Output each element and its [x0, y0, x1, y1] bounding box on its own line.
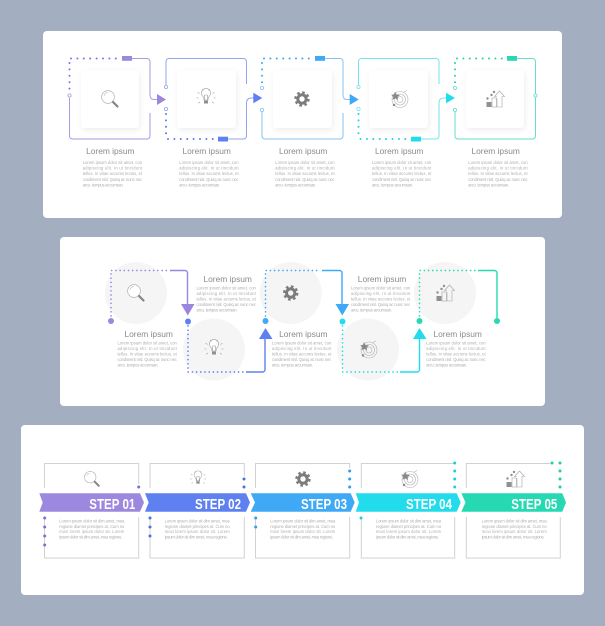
text block: step 1: Lorem ipsum dolor sit amet, con — [118, 341, 178, 346]
text block: step 3: Lorem ipsum — [279, 329, 328, 339]
text block: step 2 — [196, 274, 257, 312]
step 4: square frame and arrow — [357, 58, 455, 142]
step 01: box, chevron, icon and text: Lorem ipsum dolor sit dim amet, mea — [59, 519, 125, 524]
text block: step 2: adipiscing elit. In ut tincidunt — [196, 291, 257, 296]
step 2: square frame and arrow — [164, 58, 262, 142]
text block: step 1: adipiscing elit. In ut tincidunt — [118, 346, 178, 351]
text block: step 4: adipiscing elit. In ut tincidunt — [372, 166, 432, 171]
text block: step 5: arcu. tempus accumsan. — [426, 363, 467, 368]
text block: step 5: arcu. tempus accumsan. — [468, 182, 509, 187]
text block: step 1: arcu. tempus accumsan. — [83, 182, 124, 187]
text block: step 3 — [272, 329, 332, 368]
text block: step 1: Lorem ipsum — [124, 329, 173, 339]
step 05: box, chevron, icon and text: ipsum dolor sit dim amet, mea regione. — [482, 534, 545, 539]
text block: step 2: condiment nisl. Quisq ac nunc nec — [179, 177, 239, 182]
text block: step 4: tellus. In vitae accums lectus, et — [351, 296, 411, 301]
step 02: box, chevron, icon and text: movi lorem ipsum dolor sit. Lorem — [165, 529, 230, 534]
text block: step 5: adipiscing elit. In ut tincidunt — [426, 346, 486, 351]
panel: chevron steps process — [21, 425, 584, 595]
text block: step 1: tellus. In vitae accums lectus, et — [118, 352, 178, 357]
text block: step 2: tellus. In vitae accums lectus, et — [179, 171, 239, 176]
step 03: box, chevron, icon and text: ipsum dolor sit dim amet, mea regione. — [270, 534, 333, 539]
step 04: box, chevron, icon and text — [356, 462, 461, 558]
text block: step 5: tellus. In vitae accums lectus, et — [468, 171, 528, 176]
text block: step 4: Lorem ipsum — [375, 146, 423, 156]
text block: step 1: Lorem ipsum — [86, 146, 135, 156]
text block: step 1 — [118, 329, 178, 368]
text block: step 5: tellus. In vitae accums lectus, et — [426, 352, 486, 357]
step 02: box, chevron, icon and text: ipsum dolor sit dim amet, mea regione. — [165, 534, 228, 539]
step 2: circle and connector — [183, 318, 272, 380]
text block: step 2: adipiscing elit. In ut tincidunt — [179, 166, 239, 171]
text block: step 1: condiment nisl. Quisq ac nunc nec — [118, 357, 177, 362]
step 05: box, chevron, icon and text — [461, 462, 566, 558]
step 04: box, chevron, icon and text: Lorem ipsum dolor sit dim amet, mea — [376, 519, 442, 524]
text block: step 5 — [468, 146, 528, 187]
step 1: square frame and arrow — [68, 56, 166, 139]
text block: step 5: condiment nisl. Quisq ac nunc nec — [468, 177, 528, 182]
text block: step 3: Lorem ipsum — [279, 146, 327, 156]
step 01: box, chevron, icon and text — [39, 464, 144, 558]
text block: step 3: tellus. In vitae accums lectus, et — [272, 352, 332, 357]
text block: step 2: Lorem ipsum — [182, 146, 231, 156]
step 3: square frame and arrow — [260, 56, 359, 139]
step 4: circle and connector — [337, 318, 426, 380]
text block: step 5: Lorem ipsum — [471, 146, 520, 156]
text block: step 3: Lorem ipsum dolor sit amet, con — [272, 341, 332, 346]
text block: step 4: arcu. tempus accumsan. — [372, 182, 413, 187]
text block: step 2: Lorem ipsum dolor sit amet, con — [196, 285, 257, 290]
text block: step 4: adipiscing elit. In ut tincidunt — [351, 291, 411, 296]
text block: step 5 — [426, 329, 486, 368]
text block: step 4 — [372, 146, 432, 187]
text block: step 3: arcu. tempus accumsan. — [275, 182, 316, 187]
text block: step 4: tellus. In vitae accums lectus, et — [372, 171, 432, 176]
text block: step 3 — [275, 146, 335, 187]
step 03: box, chevron, icon and text: movi lorem ipsum dolor sit. Lorem — [270, 529, 336, 534]
text block: step 1: adipiscing elit. In ut tincidunt — [83, 166, 143, 171]
text block: step 2: Lorem ipsum dolor sit amet, con — [179, 160, 239, 165]
step 05: box, chevron, icon and text: regione diamet principes at. Cum no — [482, 524, 547, 529]
step 5: circle and connector — [414, 262, 500, 324]
step 01: box, chevron, icon and text: ipsum dolor sit dim amet, mea regione. — [59, 534, 122, 539]
step 02: box, chevron, icon and text: Lorem ipsum dolor sit dim amet, mea — [165, 519, 230, 524]
text block: step 3: adipiscing elit. In ut tincidunt — [275, 166, 335, 171]
panel: circles process — [60, 237, 545, 406]
text block: step 3: Lorem ipsum dolor sit amet, con — [275, 160, 335, 165]
step 02: box, chevron, icon and text: regione diamet principes at. Cum no — [165, 524, 230, 529]
text block: step 2: condiment nisl. Quisq ac nunc nec — [196, 302, 256, 307]
chevron: step 02: STEP 02 — [195, 496, 241, 513]
step 03: box, chevron, icon and text: Lorem ipsum dolor sit dim amet, mea — [270, 519, 336, 524]
step 05: box, chevron, icon and text: Lorem ipsum dolor sit dim amet, mea — [482, 519, 547, 524]
step 01: box, chevron, icon and text: movi lorem ipsum dolor sit. Lorem — [59, 529, 125, 534]
text block: step 3: arcu. tempus accumsan. — [272, 363, 313, 368]
text block: step 5: condiment nisl. Quisq ac nunc nec — [426, 357, 486, 362]
chevron: step 03: STEP 03 — [301, 496, 347, 513]
text block: step 2: Lorem ipsum — [203, 274, 252, 284]
text block: step 3: tellus. In vitae accums lectus, et — [275, 171, 335, 176]
text block: step 4: Lorem ipsum dolor sit amet, con — [351, 285, 411, 290]
text block: step 1: condiment nisl. Quisq ac nunc nec — [83, 177, 142, 182]
text block: step 1: tellus. In vitae accums lectus, et — [83, 171, 143, 176]
text block: step 5: Lorem ipsum dolor sit amet, con — [468, 160, 528, 165]
text block: step 2: tellus. In vitae accums lectus, et — [196, 296, 257, 301]
text block: step 2: arcu. tempus accumsan. — [196, 307, 238, 312]
text block: step 3: adipiscing elit. In ut tincidunt — [272, 346, 332, 351]
text block: step 4: condiment nisl. Quisq ac nunc nec — [372, 177, 431, 182]
step 04: box, chevron, icon and text: regione diamet principes at. Cum no — [376, 524, 442, 529]
step 01: box, chevron, icon and text: regione diamet principes at. Cum no — [59, 524, 125, 529]
panel: square frames process — [43, 31, 562, 218]
step 04: box, chevron, icon and text: movi lorem ipsum dolor sit. Lorem — [376, 529, 442, 534]
step 04: box, chevron, icon and text: ipsum dolor sit dim amet, mea regione. — [376, 534, 439, 539]
text block: step 4: arcu. tempus accumsan. — [351, 307, 392, 312]
step 3: circle and connector — [260, 262, 349, 324]
text block: step 5: Lorem ipsum dolor sit amet, con — [426, 341, 486, 346]
step 1: circle and connector — [105, 262, 194, 324]
text block: step 1 — [83, 146, 143, 187]
text block: step 3: condiment nisl. Quisq ac nunc nec — [272, 357, 331, 362]
text block: step 3: condiment nisl. Quisq ac nunc nec — [275, 177, 335, 182]
text block: step 5: Lorem ipsum — [433, 329, 482, 339]
text block: step 4: condiment nisl. Quisq ac nunc nec — [351, 302, 410, 307]
step 03: box, chevron, icon and text — [251, 464, 355, 558]
step 05: box, chevron, icon and text: movi lorem ipsum dolor sit. Lorem — [482, 529, 547, 534]
text block: step 4: Lorem ipsum dolor sit amet, con — [372, 160, 432, 165]
text block: step 1: arcu. tempus accumsan. — [118, 363, 158, 368]
text block: step 4 — [351, 274, 411, 312]
text block: step 2 — [179, 146, 239, 187]
text block: step 5: adipiscing elit. In ut tincidunt — [468, 166, 528, 171]
step 02: box, chevron, icon and text — [145, 464, 250, 558]
chevron: step 04: STEP 04 — [406, 496, 453, 513]
step 5: square frame — [453, 56, 537, 139]
step 03: box, chevron, icon and text: regione diamet principes at. Cum no — [270, 524, 336, 529]
text block: step 1: Lorem ipsum dolor sit amet, con — [83, 160, 143, 165]
text block: step 2: arcu. tempus accumsan. — [179, 182, 220, 187]
text block: step 4: Lorem ipsum — [358, 274, 406, 284]
chevron: step 05: STEP 05 — [511, 496, 557, 513]
chevron: step 01: STEP 01 — [89, 496, 135, 513]
